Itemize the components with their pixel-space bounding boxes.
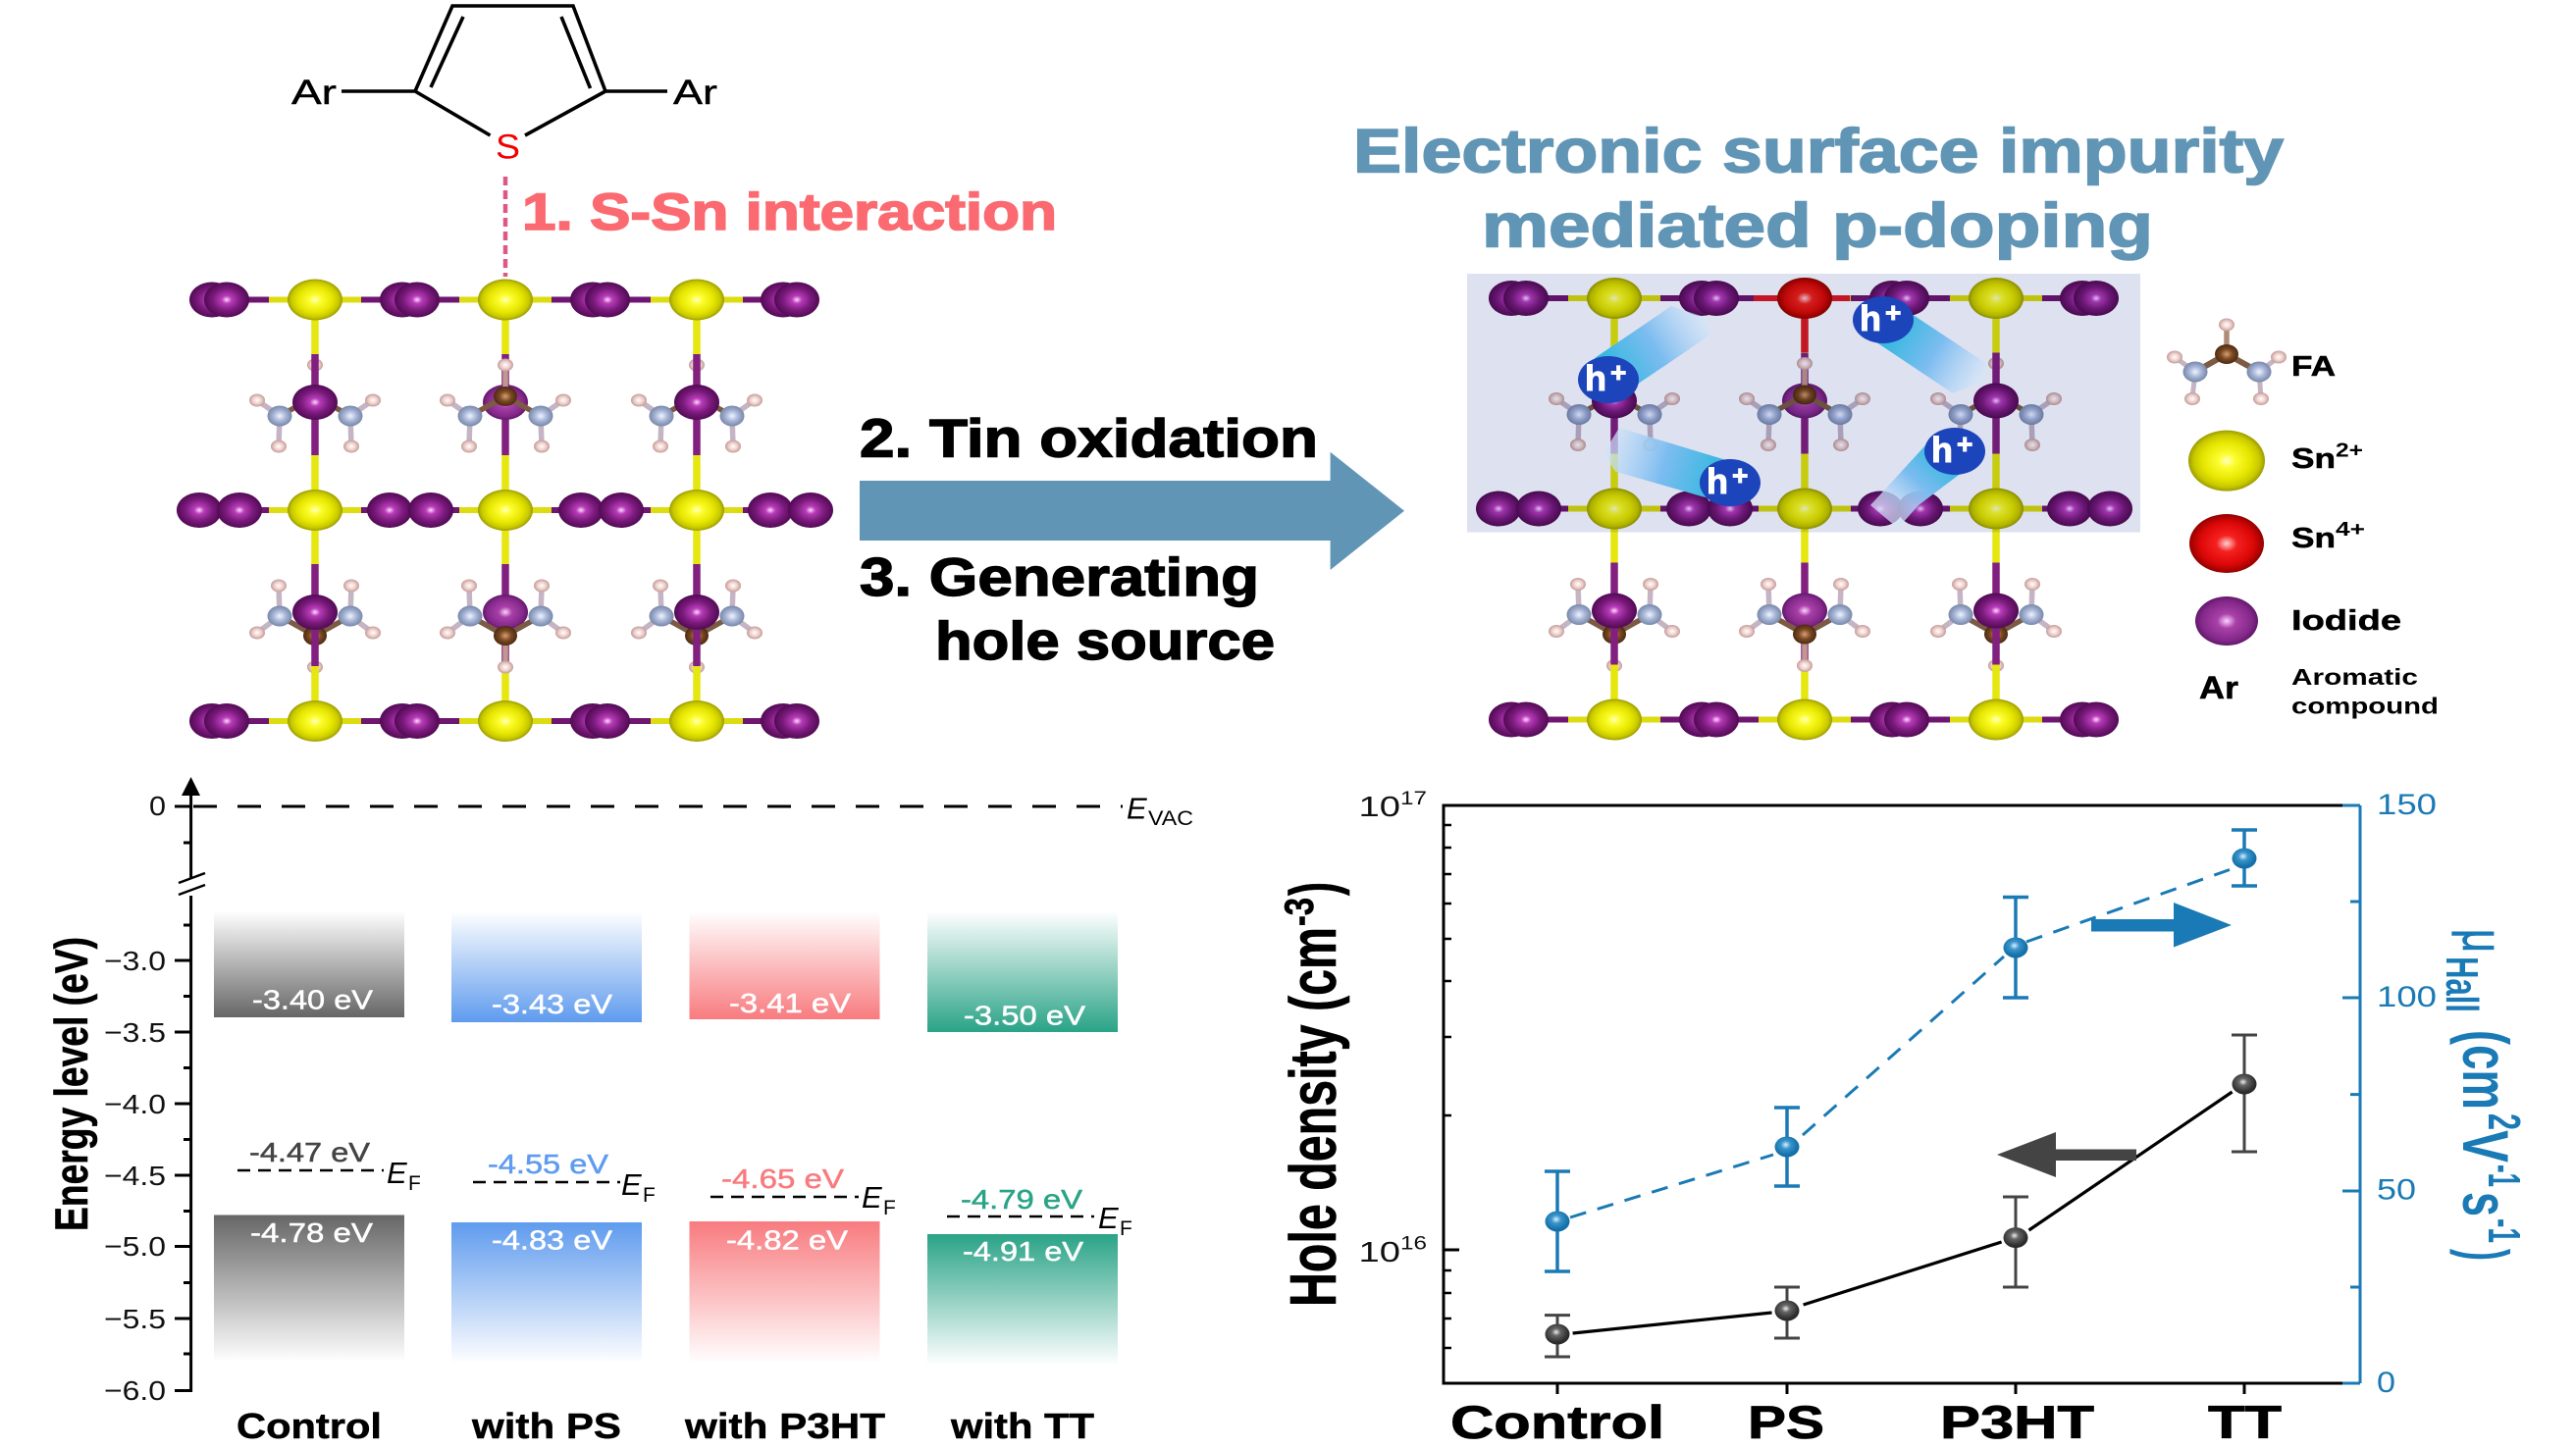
hole carrier h+ 2: +	[1885, 297, 1901, 328]
y-axis title: Hall mobility: -1	[2479, 1218, 2530, 1243]
Fermi level values: -4.55 eV	[488, 1149, 608, 1179]
arrow: left axis indicator	[1997, 1132, 2136, 1177]
y-axis title: Hall mobility: (cm	[2449, 1030, 2522, 1110]
E_F labels: F	[408, 1172, 421, 1195]
category labels: with PS	[471, 1406, 621, 1446]
category labels: Control	[237, 1406, 382, 1446]
E_F labels	[387, 1156, 1132, 1240]
category labels: with P3HT	[684, 1406, 885, 1446]
legend: Sn4+	[2189, 514, 2365, 573]
y-axis title: Hall mobility: 2	[2479, 1113, 2530, 1130]
legend	[2167, 318, 2439, 719]
Hall mobility series	[1545, 830, 2257, 1271]
legend: Ar aromatic compound: Ar	[2199, 670, 2238, 705]
legend: Sn2+: 2+	[2336, 440, 2363, 462]
hole carrier h+ 4: h	[1931, 430, 1953, 470]
tick labels: −3.0	[104, 946, 166, 976]
tick labels: 0	[149, 791, 166, 821]
Fermi level values	[249, 1137, 1082, 1215]
E_F labels: F	[1120, 1217, 1132, 1240]
step label: tin oxidation: 2. Tin oxidation	[860, 408, 1318, 469]
label: Ar left: Ar	[291, 74, 337, 112]
Sn4+ atom with red bonds	[1754, 278, 1850, 352]
band value labels: -4.82 eV	[726, 1225, 848, 1256]
dashed S-Sn interaction line	[503, 177, 507, 277]
tick labels	[104, 791, 166, 1406]
band value labels: -4.83 eV	[492, 1225, 612, 1256]
Fermi level dashed lines	[237, 1170, 1094, 1216]
axis	[175, 793, 205, 1391]
legend: Ar aromatic compound: compound	[2291, 694, 2439, 719]
step label: generating hole source: 3. Generating	[860, 546, 1259, 607]
band value labels: -3.43 eV	[492, 989, 612, 1019]
plot frame and left/bottom ticks	[1444, 805, 2360, 1394]
E_F labels: F	[643, 1184, 656, 1207]
crystal structure: before oxidation	[177, 279, 833, 742]
Fermi level values: -4.79 eV	[961, 1184, 1082, 1215]
right axis	[2342, 805, 2360, 1383]
hole carrier h+ 1: h	[1585, 358, 1606, 398]
hole carrier h+ 1	[1578, 356, 1639, 403]
legend: Sn4+: Sn	[2291, 523, 2336, 554]
hole migration trails	[1595, 306, 1987, 528]
bars: valence band	[214, 1215, 1118, 1366]
band value labels: -3.41 eV	[729, 988, 851, 1018]
y-axis title: Energy level (eV)	[45, 937, 97, 1231]
y-axis title: hole density: )	[1277, 882, 1350, 896]
category labels: P3HT	[1940, 1396, 2094, 1448]
category labels	[237, 1406, 1094, 1446]
label: E_VAC: VAC	[1148, 807, 1193, 830]
hole carrier h+ 3: h	[1707, 461, 1728, 501]
right axis labels: 100	[2377, 981, 2437, 1013]
right axis labels: 50	[2377, 1173, 2416, 1207]
label: Ar right: Ar	[673, 74, 717, 112]
molecule: thiophene with Ar groups	[291, 6, 717, 167]
heading: electronic surface impurity mediated p-doping: mediated p-doping	[1482, 192, 2153, 261]
y-axis title: hole density: -3	[1276, 898, 1322, 926]
y-axis title: hole density: Hole density (cm	[1277, 927, 1350, 1307]
E_F labels: E	[862, 1180, 882, 1215]
legend: Sn2+: Sn	[2291, 443, 2336, 475]
arrow: process direction	[860, 452, 1404, 570]
tick labels: −3.5	[104, 1017, 166, 1048]
heading: S-Sn interaction: 1. S-Sn interaction	[522, 183, 1057, 241]
y-axis title: Hall mobility: Hall	[2437, 957, 2488, 1012]
tick labels: −6.0	[104, 1375, 166, 1406]
y-axis title: Hall mobility	[2437, 929, 2530, 1261]
hole density series	[1545, 1035, 2257, 1357]
chart: hole density and Hall mobility	[1276, 789, 2530, 1448]
legend: iodide	[2195, 596, 2401, 646]
axis arrow	[182, 777, 200, 796]
arrow: right axis indicator	[2091, 903, 2232, 948]
legend: FA molecule	[2167, 318, 2336, 405]
step label: generating hole source: hole source	[935, 610, 1275, 671]
tick labels: −4.0	[104, 1089, 166, 1119]
y-axis title: Hall mobility: μ	[2450, 929, 2514, 953]
tick labels: −5.0	[104, 1231, 166, 1262]
hole carrier h+ 2	[1853, 296, 1914, 343]
legend: Ar aromatic compound: Aromatic	[2291, 664, 2418, 690]
legend: Sn4+: 4+	[2336, 519, 2365, 541]
E_F labels: E	[1098, 1201, 1119, 1235]
legend: iodide: Iodide	[2291, 605, 2401, 637]
left axis labels	[1358, 789, 1427, 1268]
bars: conduction band	[214, 911, 1118, 1032]
y-axis title: Hall mobility: V	[2449, 1130, 2522, 1163]
band value labels: -3.50 eV	[964, 1001, 1085, 1030]
category labels: with TT	[950, 1406, 1094, 1446]
vacuum level dashed line	[193, 804, 1123, 808]
left axis labels: 10	[1358, 1237, 1400, 1268]
category labels: Control	[1450, 1396, 1664, 1448]
hole carrier h+ 1: +	[1610, 357, 1626, 388]
right axis labels: 150	[2377, 789, 2437, 821]
legend: Ar aromatic compound	[2199, 664, 2439, 719]
hole carrier h+ 3: +	[1732, 460, 1748, 491]
category labels: PS	[1748, 1396, 1824, 1448]
y-axis title: Hall mobility: -1	[2479, 1164, 2530, 1187]
y-axis title: Hall mobility: )	[2449, 1249, 2522, 1261]
hole carrier h+ 2: h	[1860, 298, 1881, 338]
tick labels: −4.5	[104, 1161, 166, 1191]
left axis labels: 17	[1400, 789, 1427, 809]
chart: energy level diagram	[45, 777, 1193, 1446]
band value labels: -4.78 eV	[250, 1217, 373, 1248]
left axis labels: 10	[1358, 792, 1400, 823]
E_F labels: E	[387, 1156, 407, 1190]
left axis labels: 16	[1400, 1234, 1427, 1255]
band value labels	[250, 985, 1085, 1267]
hole carrier h+ 4: +	[1957, 429, 1972, 459]
step label: generating hole source	[860, 546, 1275, 671]
hole carrier h+ 4	[1924, 428, 1985, 475]
Fermi level values: -4.65 eV	[721, 1164, 844, 1194]
E_F labels: F	[883, 1197, 896, 1219]
E_F labels: E	[621, 1167, 642, 1202]
label: E_VAC	[1127, 792, 1193, 830]
label: E_VAC: E	[1127, 792, 1147, 826]
heading: electronic surface impurity mediated p-doping: Electronic surface impurity	[1353, 118, 2284, 186]
band value labels: -4.91 eV	[963, 1236, 1083, 1267]
right axis labels: 0	[2377, 1367, 2395, 1399]
y-axis title: Hall mobility: s	[2449, 1192, 2522, 1216]
category labels	[1450, 1396, 2282, 1448]
legend: FA molecule: FA	[2291, 351, 2336, 383]
hole carrier h+ 3	[1700, 459, 1761, 506]
Fermi level values: -4.47 eV	[249, 1137, 370, 1167]
band value labels: -3.40 eV	[252, 985, 373, 1015]
tick labels: −5.5	[104, 1304, 166, 1334]
heading: electronic surface impurity mediated p-doping	[1353, 118, 2284, 261]
legend: Sn2+	[2188, 431, 2363, 491]
right axis labels	[2377, 789, 2437, 1399]
label: sulfur atom: S	[496, 128, 520, 167]
panel: oxidised crystal structure with surface shading	[1467, 274, 2140, 740]
category labels: TT	[2208, 1396, 2282, 1448]
